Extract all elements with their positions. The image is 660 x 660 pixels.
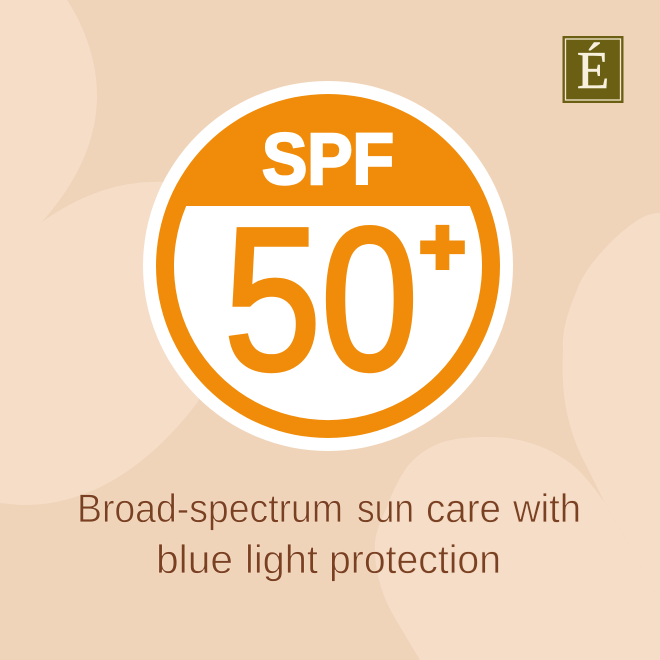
- caption line 2: [156, 538, 501, 582]
- SPF 50+ badge: [143, 81, 513, 451]
- badge orange disc: [156, 94, 500, 438]
- background blob: upper left: [0, 0, 250, 505]
- caption line 2: blue: [156, 538, 233, 582]
- caption line 2: light: [245, 538, 318, 582]
- badge white lower panel: [174, 206, 482, 420]
- caption line 1: Broad-spectrum: [77, 487, 343, 531]
- caption line 1: with: [512, 487, 581, 531]
- logo outer frame: [562, 36, 624, 103]
- plus sign: +: [419, 202, 466, 290]
- caption: [77, 487, 581, 582]
- caption line 1: sun: [357, 487, 414, 531]
- 50 numeral: 50: [224, 186, 418, 413]
- logo badge: [562, 36, 624, 103]
- caption line 2: protection: [329, 538, 501, 582]
- background blob: right: [563, 213, 660, 600]
- background blob: bottom right: [375, 437, 660, 660]
- logo cream line: [566, 39, 620, 100]
- badge white outer ring: [143, 81, 513, 451]
- caption line 1: [77, 487, 581, 531]
- logo letter: É: [577, 42, 609, 100]
- SPF label: SPF: [262, 120, 394, 200]
- caption line 1: care: [426, 487, 501, 531]
